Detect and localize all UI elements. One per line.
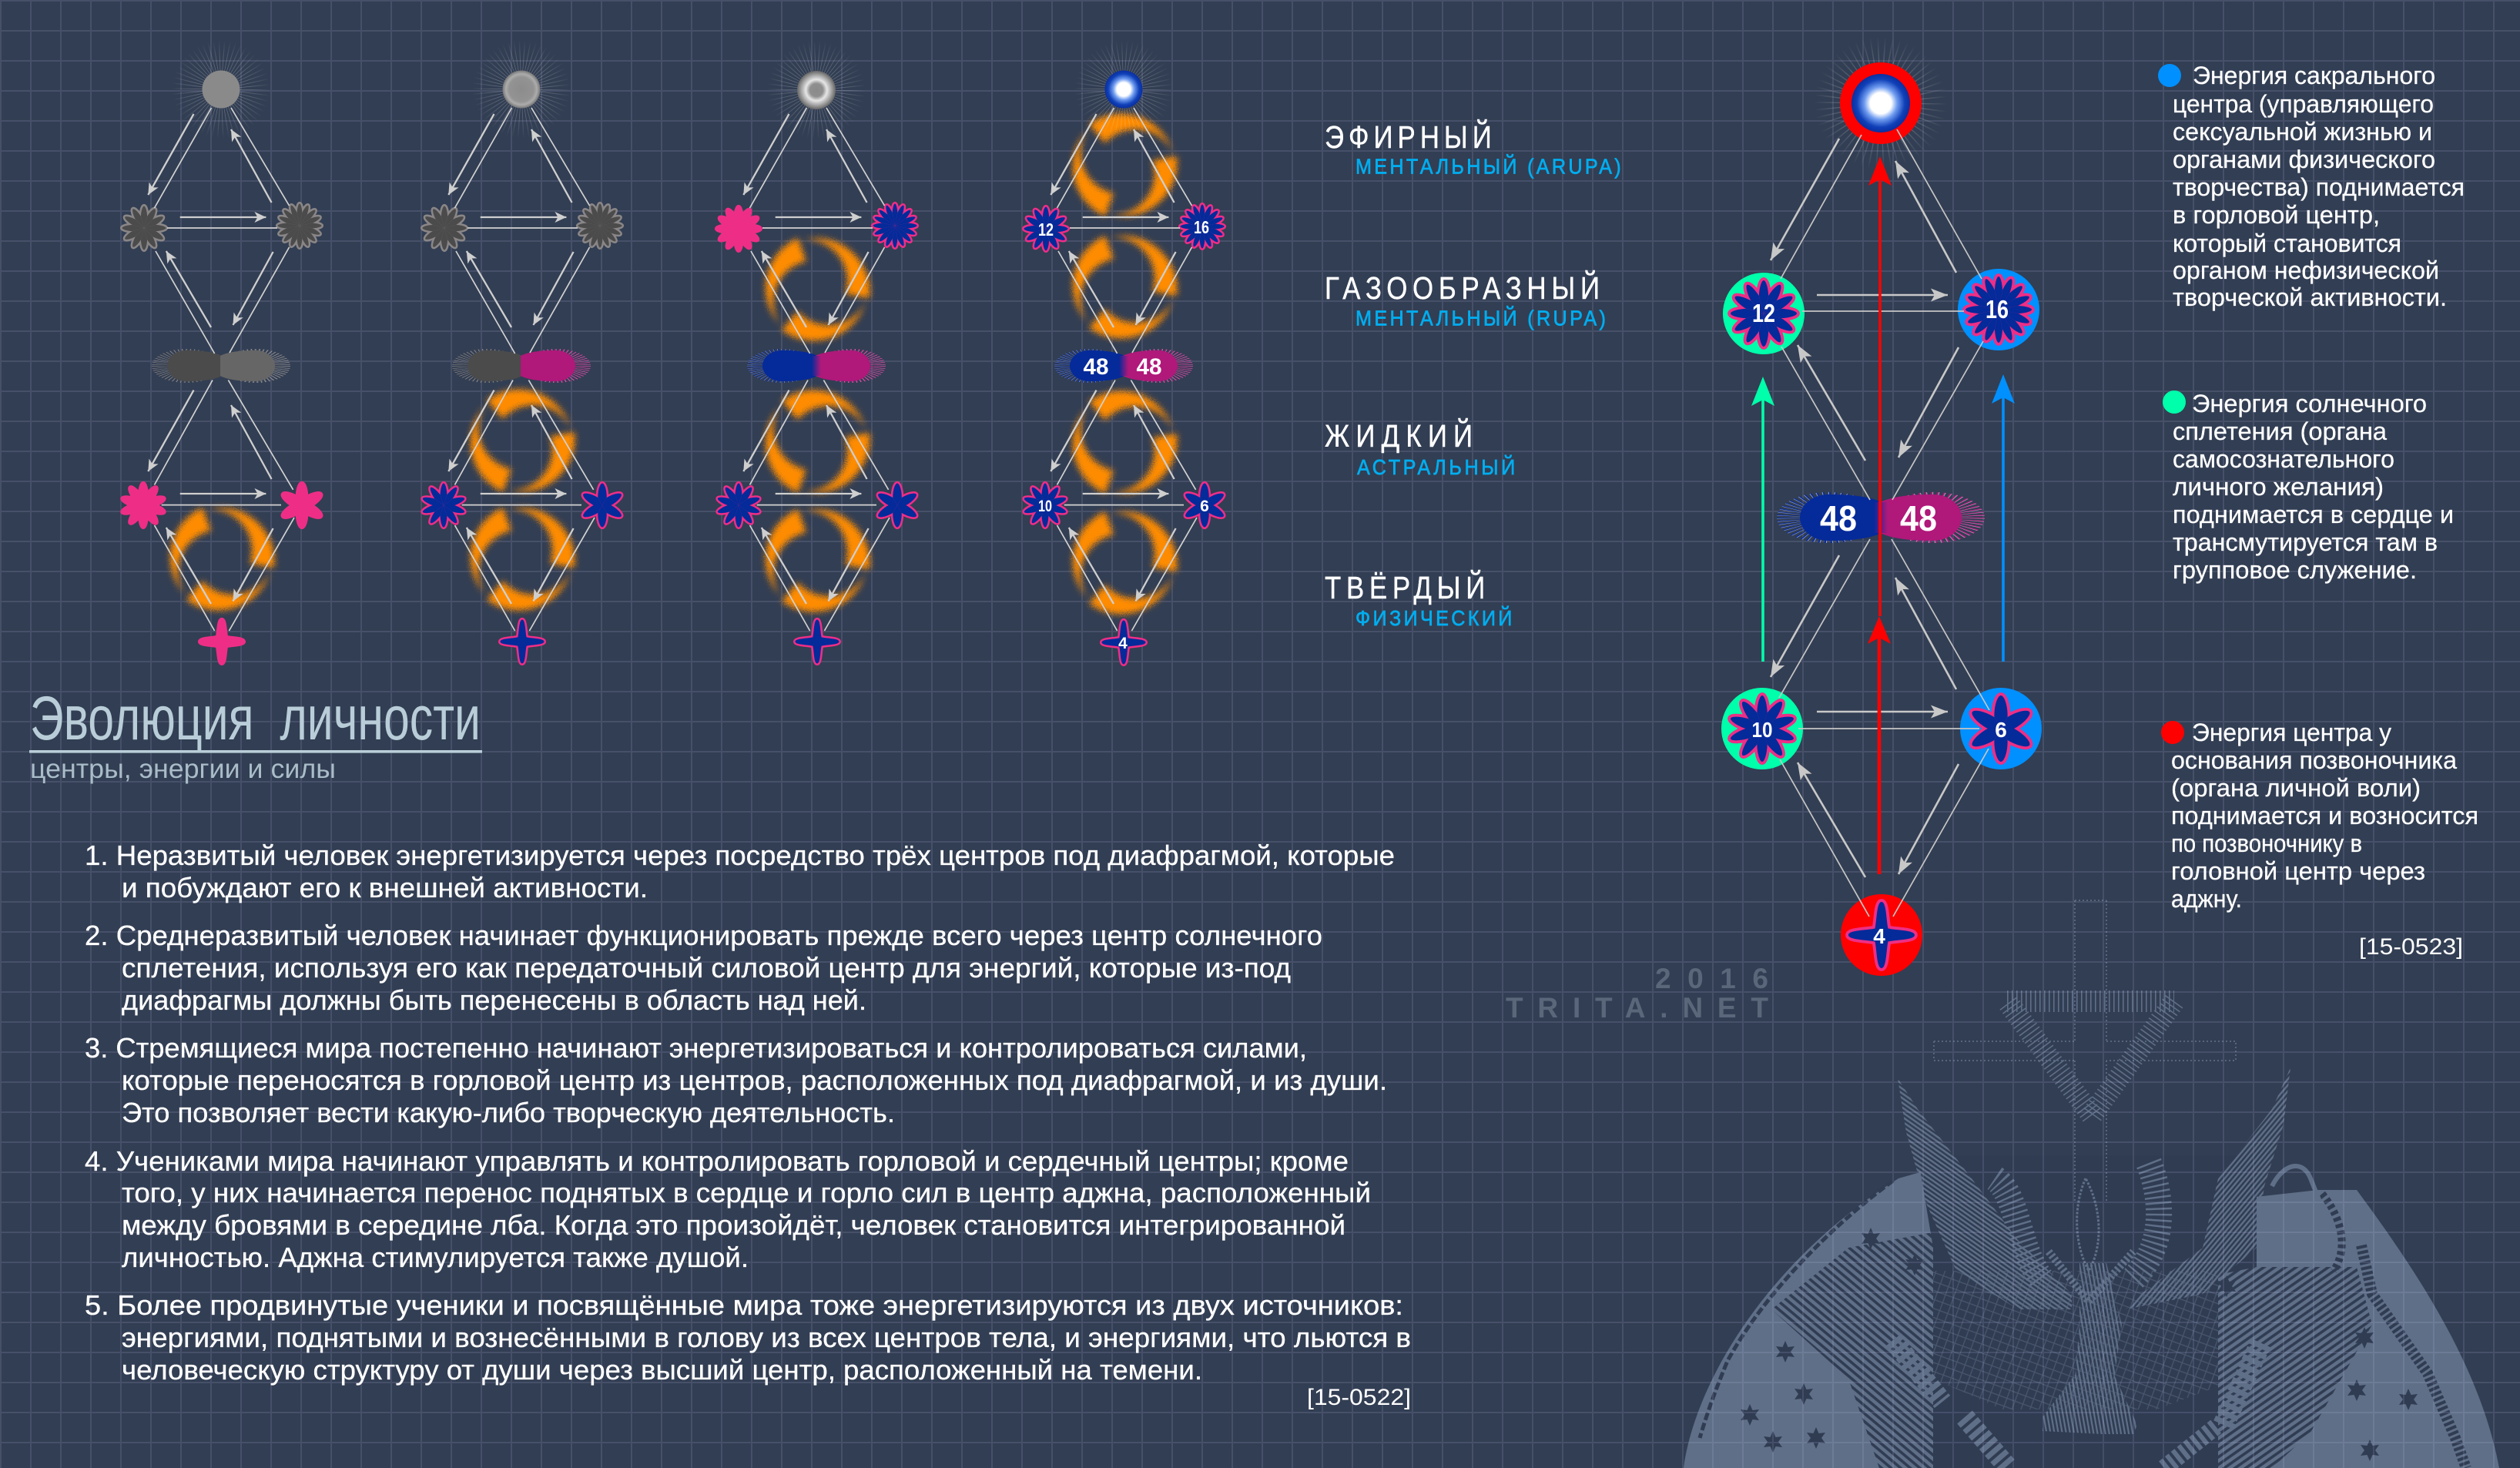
engraving: globe, dove, wings and cross: [1684, 900, 2499, 1468]
legend: sacral centre energy: центра (управляющего: [2173, 90, 2434, 118]
large diagram: energy transfer: [1721, 59, 2042, 976]
large diagram: energy transfer: 6: [1995, 718, 2007, 742]
legend: sacral centre energy: сексуальной жизнью и: [2173, 118, 2432, 146]
watermark: [1506, 963, 1768, 1024]
title: Эволюция личности: [30, 684, 481, 753]
watermark: TRITA.NET: [1506, 992, 1768, 1024]
numbered text: того, у них начинается перенос поднятых в сердце и горло сил в центр аджна, расположенный: [122, 1177, 1371, 1208]
legend: solar plexus energy: групповое служение.: [2173, 556, 2417, 584]
plane labels: ГАЗООБРАЗНЫЙ: [1325, 269, 1600, 307]
legend: base of spine energy: [15-0523]: [2359, 934, 2463, 960]
legend: base of spine energy: [2161, 719, 2478, 960]
numbered text: 2. Среднеразвитый человек начинает функционировать прежде всего через центр солнечного: [85, 920, 1322, 951]
numbered text: между бровями в середине лба. Когда это произойдёт, человек становится интегрированной: [122, 1209, 1345, 1241]
legend: solar plexus energy: сплетения (органа: [2173, 417, 2387, 445]
large diagram: energy transfer: 48: [1900, 498, 1937, 538]
legend: base of spine energy: основания позвоночника: [2171, 746, 2457, 774]
numbered text: [15-0522]: [1307, 1385, 1411, 1410]
legend: sacral centre energy: творческой активности.: [2173, 283, 2447, 311]
legend: base of spine energy: головной центр через: [2171, 857, 2425, 885]
numbered text: 1. Неразвитый человек энергетизируется через посредство трёх центров под диафрагмой, которые: [85, 840, 1395, 871]
diagram 4: disciples, all centres numbered: 48: [1137, 354, 1161, 380]
plane labels: ЭФИРНЫЙ: [1325, 118, 1492, 156]
plane labels: ФИЗИЧЕСКИЙ: [1356, 606, 1512, 630]
numbered text: человеческую структуру от души через высший центр, расположенный на темени.: [122, 1354, 1202, 1386]
legend: sacral centre energy: Энергия сакрального: [2193, 62, 2435, 89]
legend: sacral centre energy: творчества) поднимается: [2173, 173, 2465, 201]
diagram 4: disciples, all centres numbered: 10: [1038, 498, 1052, 515]
legend: solar plexus energy: личного желания): [2173, 473, 2384, 501]
legend: base of spine energy: аджну.: [2171, 885, 2242, 913]
large diagram: energy transfer: 4: [1873, 924, 1885, 948]
legend: base of spine energy: Энергия центра у: [2192, 719, 2391, 746]
plane labels: ТВЁРДЫЙ: [1325, 568, 1485, 606]
numbered text: которые переносятся в горловой центр из центров, расположенных под диафрагмой, и из души.: [122, 1064, 1387, 1096]
large diagram: energy transfer: 16: [1986, 295, 2009, 323]
diagram 4: disciples, all centres numbered: 4: [1118, 635, 1128, 652]
large diagram: energy transfer: 48: [1820, 498, 1857, 538]
legend: sacral centre energy: в горловой центр,: [2173, 201, 2380, 229]
numbered text: 3. Стремящиеся мира постепенно начинают энергетизироваться и контролироваться силами,: [85, 1032, 1307, 1064]
diagram 4: disciples, all centres numbered: [1024, 56, 1226, 664]
large diagram: energy transfer: 10: [1751, 718, 1773, 742]
numbered text: личностью. Аджна стимулируется также душой.: [122, 1242, 749, 1273]
legend: solar plexus energy: [2163, 390, 2454, 584]
legend: solar plexus energy: Энергия солнечного: [2192, 390, 2427, 417]
numbered text: и побуждают его к внешней активности.: [122, 872, 648, 903]
plane labels: АСТРАЛЬНЫЙ: [1357, 455, 1515, 479]
numbered text: энергиями, поднятыми и вознесёнными в голову из всех центров тела, и энергиями, что льются в: [122, 1322, 1411, 1353]
legend: sacral centre energy: [2158, 62, 2465, 311]
diagram 4: disciples, all centres numbered: 12: [1038, 220, 1054, 240]
legend: sacral centre energy: который становится: [2173, 230, 2401, 257]
numbered text: сплетения, используя его как передаточный силовой центр для энергий, которые из-под: [122, 952, 1291, 984]
diagram 3: aspirants of the world: [716, 57, 919, 664]
plane labels: МЕНТАЛЬНЫЙ (RUPA): [1356, 306, 1606, 330]
legend: base of spine energy: (органа личной воли): [2171, 774, 2421, 802]
numbered text: 4. Учениками мира начинают управлять и контролировать горловой и сердечный центры; кроме: [85, 1145, 1349, 1177]
legend: base of spine energy: поднимается и возносится: [2171, 802, 2478, 830]
legend: sacral centre energy: органом нефизической: [2173, 256, 2439, 284]
watermark: 2016: [1655, 963, 1768, 994]
numbered text: Это позволяет вести какую-либо творческую деятельность.: [122, 1097, 895, 1128]
plane labels: МЕНТАЛЬНЫЙ (ARUPA): [1356, 154, 1621, 179]
diagram 4: disciples, all centres numbered: 48: [1083, 354, 1109, 380]
legend: solar plexus energy: поднимается в сердце и: [2173, 501, 2454, 528]
legend: sacral centre energy: органами физического: [2173, 146, 2435, 173]
legend: solar plexus energy: самосознательного: [2173, 445, 2394, 473]
large diagram: energy transfer: 12: [1752, 299, 1775, 327]
title: центры, энергии и силы: [30, 754, 336, 784]
plane labels: ЖИДКИЙ: [1325, 417, 1473, 454]
diagram 1: undeveloped person: [122, 56, 323, 664]
plane labels: [1325, 118, 1621, 630]
diagram 4: disciples, all centres numbered: 16: [1194, 217, 1209, 237]
title: [29, 684, 482, 784]
legend: base of spine energy: по позвоночнику в: [2171, 830, 2362, 857]
diagram 4: disciples, all centres numbered: 6: [1200, 498, 1209, 515]
numbered text: диафрагмы должны быть перенесены в область над ней.: [122, 984, 866, 1016]
numbered text: 5. Более продвинутые ученики и посвящённые мира тоже энергетизируются из двух источников:: [85, 1289, 1403, 1321]
diagram 2: average person: [422, 56, 624, 664]
legend: solar plexus energy: трансмутируется там в: [2173, 528, 2438, 556]
numbered text: [85, 840, 1411, 1410]
